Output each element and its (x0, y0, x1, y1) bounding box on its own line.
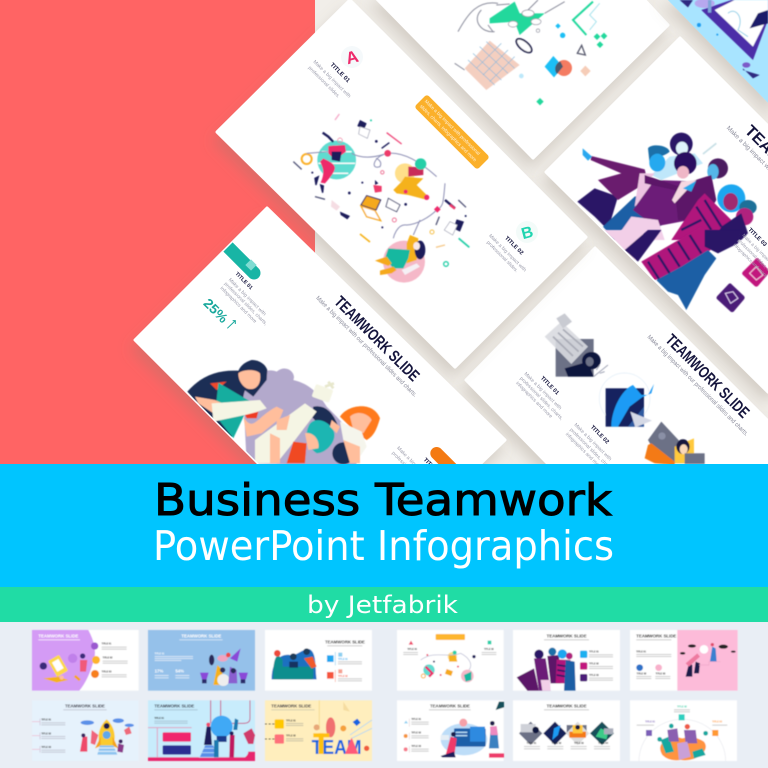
icon: letter A badge: A (344, 47, 361, 68)
text: title 02: TITLE 02 (503, 236, 524, 256)
author line: by Jetfabrik (307, 591, 458, 619)
slide text: three tasks card: Make a big impact with our professional slides and charts. (646, 334, 750, 438)
thumbnail: four diamonds slide: TITLE 02 (552, 743, 562, 745)
slide card: workflow illustration (217, 0, 586, 367)
text: title 01 and stat: 25% (201, 296, 231, 326)
thumbnail: team icons slide: TEAMWORK SLIDE (547, 633, 587, 638)
thumbnail: dashboard slide: TEAMWORK SLIDE (430, 704, 470, 709)
slide text: team card (725, 122, 768, 280)
thumbnail: dashboard slide: TITLE 02 (411, 733, 422, 735)
slide text: three tasks card: Make a big impact with (523, 371, 563, 411)
title: teamwork slide: Make a big impact with our professional slides and charts. (314, 295, 418, 399)
thumbnail: team icons slide: TITLE 03 (589, 675, 599, 677)
thumbnail: desk team slide: TITLE 01 (338, 659, 348, 661)
tab: teal pill (225, 244, 257, 273)
thumbnails: left group (32, 630, 372, 761)
icon: letter B badge (516, 221, 538, 243)
banner: blue title band (0, 464, 768, 587)
illustration: desk and monitor (680, 0, 768, 78)
thumbnail: pink panel slide: TITLE 01 (636, 651, 647, 653)
callout: orange label: Make a big impact with professional (423, 99, 481, 157)
text: title 02: professional slides. (485, 240, 519, 274)
thumbnail: four diamonds slide: TITLE 04 (598, 742, 609, 745)
thumbnail: workflow slide: TITLE 02 (484, 649, 494, 651)
slide card: top partial illustration (373, 0, 668, 158)
illustration: connected workers (293, 114, 469, 283)
thumbnail: team icons slide: TITLE 01 (589, 652, 599, 654)
thumbnails: right group (397, 630, 738, 761)
thumbnail: TEAM letters slide: TEAMWORK SLIDE (271, 704, 311, 709)
thumbnail: pink panel slide: TITLE 03 (656, 673, 666, 675)
slide text: three tasks card: professional slides, charts, (568, 427, 614, 473)
title: Business Teamwork: Business Teamwork (154, 475, 613, 526)
thumbnail: purple slide: TITLE 03 (102, 671, 112, 673)
thumbnail: desk team slide (265, 630, 372, 691)
thumbnail: bulb slide: TEAMWORK SLIDE (154, 704, 194, 709)
thumbnail: workflow slide: TITLE 01 (407, 649, 418, 651)
slide text: team card: infographics and more (732, 242, 768, 279)
icon: letter B badge: B (520, 224, 535, 243)
slide card: teamwork chess illustration (135, 208, 505, 486)
callout: orange label (414, 94, 490, 170)
thumbnail: blue slide: TITLE 01 (155, 653, 165, 655)
illustration: team around chess piece (187, 360, 380, 467)
thumbnail: TEAM letters slide: TEAM (312, 736, 362, 759)
thumbnail: blue slide: TEAMWORK SLIDE (181, 633, 221, 638)
slide card: three tasks (460, 246, 768, 464)
thumbnail: rocket slide (32, 700, 139, 761)
text: title 01: professional slides. (307, 65, 341, 99)
illustration: hands and shapes (455, 0, 607, 105)
thumbnail: purple slide: TITLE 01 (102, 644, 112, 646)
slide text: three tasks card (514, 331, 752, 473)
thumbnail: arc team slide: TITLE 01 (645, 722, 656, 724)
thumbnail: rocket slide: TEAMWORK SLIDE (65, 704, 105, 709)
thumbnail: TEAM letters slide: TITLE 01 (286, 720, 296, 722)
hero background (0, 0, 768, 464)
text: title 01 and stat (201, 271, 268, 328)
thumbnail: arc team slide: TITLE 02 (677, 706, 688, 708)
thumbnail: four diamonds slide: TEAMWORK SLIDE (547, 704, 587, 709)
slide card: light blue desk scene (663, 0, 768, 110)
slide text: three tasks card: infographics and more (564, 431, 603, 471)
thumbnail: four diamonds slide: TITLE 01 (527, 743, 537, 745)
callout: orange label: slides, charts, infographics and more (418, 104, 478, 163)
slide text: three tasks card: professional slides, charts, (518, 376, 564, 422)
illustration: diamonds with workers (545, 313, 705, 465)
thumbnail: dashboard slide: TITLE 01 (411, 719, 422, 721)
thumbnail: arc team slide: TITLE 03 (712, 722, 723, 724)
slide text: three tasks card: Make a big impact with (573, 422, 613, 462)
thumbnail: bulb slide (148, 700, 255, 761)
illustration: team group (577, 133, 768, 312)
text: title 02 and tab: TITLE 02 (422, 457, 443, 478)
slide card: team of colleagues (546, 38, 768, 392)
thumbnail: bulb slide: TITLE 01 (154, 718, 165, 720)
text: title 01 and stat: Make a big impact with (227, 277, 267, 317)
subtitle: PowerPoint Infographics: PowerPoint Infographics (153, 522, 614, 570)
text: title 01: Make a big impact with (312, 59, 352, 100)
thumbnail: team icons slide (513, 630, 620, 691)
text: title 01 and stat: TITLE 01 (234, 271, 254, 291)
thumbnail: desk team slide: TITLE 02 (338, 676, 348, 678)
banner: green author band (0, 587, 768, 622)
thumbnail: pink panel slide: TITLE 02 (637, 673, 647, 675)
thumbnail gallery background (0, 622, 768, 768)
thumbnail: purple slide: TITLE 02 (103, 658, 113, 660)
thumbnail: rocket slide: TITLE 02 (41, 733, 52, 735)
thumbnail: purple slide (32, 630, 139, 691)
thumbnail: TEAM letters slide: TITLE 02 (286, 736, 296, 738)
text: title 02 and tab: professional slides (390, 450, 424, 484)
title: teamwork slide: TEAMWORK SLIDE (330, 293, 422, 385)
slide text: three tasks card: TITLE 02 (589, 424, 610, 445)
thumbnail: rocket slide: TITLE 03 (41, 747, 52, 749)
slide text: team card: TITLE 03 (747, 227, 767, 248)
thumbnail: four diamonds slide (513, 700, 620, 761)
thumbnail: dashboard slide: TITLE 03 (411, 746, 422, 748)
thumbnail: pink panel slide: TEAMWORK SLIDE (636, 633, 676, 638)
thumbnail: blue slide (148, 630, 255, 691)
text: title 01 and stat: infographics and more (219, 285, 258, 325)
text: title 02 and tab: Make a big impact with (395, 445, 435, 486)
thumbnail: blue slide: 54% (175, 669, 184, 674)
text: title 01: TITLE 01 (329, 62, 351, 85)
thumbnail: pink panel slide (630, 630, 738, 691)
thumbnail: team icons slide: TITLE 02 (589, 663, 599, 665)
text: title 02: Make a big impact with (487, 233, 527, 273)
thumbnail: dashboard slide (397, 700, 504, 761)
thumbnail: TEAM letters slide (265, 700, 372, 761)
text: title 02 and tab (391, 446, 456, 464)
slide text: three tasks card: infographics and more (514, 380, 554, 420)
text: title 01 and stat: professional slides, charts, (223, 281, 268, 327)
thumbnail: arc team slide (630, 700, 737, 761)
thumbnail: desk team slide: TEAMWORK SLIDE (325, 639, 365, 644)
thumbnail: blue slide: 17% (155, 669, 163, 674)
thumbnail: workflow slide (397, 630, 504, 691)
thumbnail: four diamonds slide: TITLE 03 (574, 743, 584, 745)
thumbnail: purple slide: TEAMWORK SLIDE (38, 633, 78, 638)
slide text: three tasks card: TITLE 01 (539, 375, 560, 396)
thumbnail: rocket slide: TITLE 01 (41, 720, 52, 722)
